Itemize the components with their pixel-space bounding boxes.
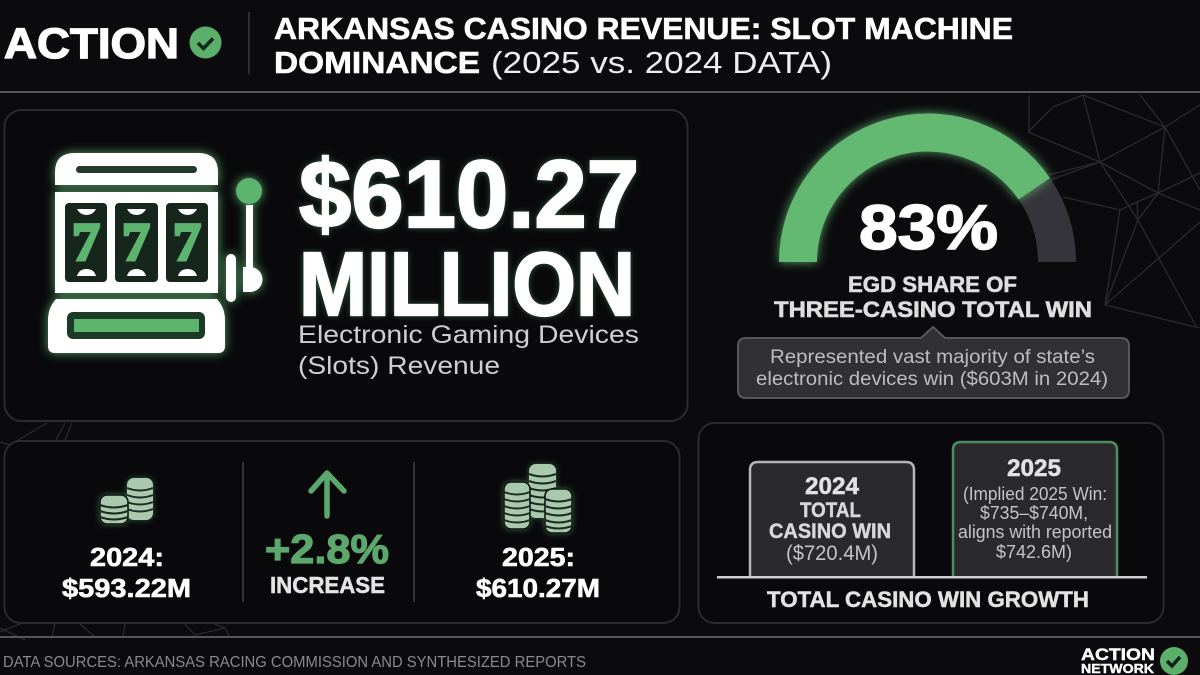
bar: 2024: ($720.4M) [786, 542, 878, 565]
label: increase: INCREASE [270, 572, 385, 598]
bar: 2024 [750, 462, 914, 577]
title: (2025 vs. 2024 DATA) [491, 45, 832, 80]
panel: slots revenue [4, 110, 688, 421]
bar: 2025: $742.6M) [996, 542, 1072, 562]
logo: Action: ACTION [4, 20, 179, 68]
bar: 2025: aligns with reported [958, 522, 1112, 542]
label: 2025 value [476, 542, 600, 603]
callout [738, 327, 1129, 398]
callout: Represented vast majority of state’s [770, 347, 1095, 368]
gauge label [774, 272, 1092, 322]
icon: slot machine: 7 [173, 212, 201, 272]
title: DOMINANCE [274, 45, 480, 80]
footer: data sources: DATA SOURCES: ARKANSAS RACING COMMISSION AND SYNTHESIZED REPORTS [3, 654, 586, 671]
icon: up arrow [311, 473, 344, 516]
label: increase [265, 526, 389, 598]
gauge label: THREE-CASINO TOTAL WIN [774, 297, 1092, 322]
big number: $610.27 [299, 141, 639, 248]
bar: 2025: (Implied 2025 Win: [963, 484, 1107, 504]
gauge: 83% share [798, 133, 1057, 263]
icon: slot machine [48, 153, 262, 353]
big unit: MILLION [299, 235, 635, 335]
icon: coins 2024 [100, 478, 153, 524]
bar: 2025 [953, 442, 1117, 577]
bar: 2025: $735–$740M, [980, 503, 1088, 523]
description: (Slots) Revenue [298, 352, 500, 380]
label: 2024 value: $593.22M [62, 573, 191, 603]
bar: 2024: 2024 [805, 473, 860, 500]
gauge: 83% share: 83% [859, 193, 998, 263]
bar: 2024: TOTAL [800, 499, 861, 522]
callout: electronic devices win ($603M in 2024) [756, 369, 1108, 390]
label: 2024 value [62, 542, 191, 603]
title [274, 11, 1013, 80]
bar: 2024: CASINO WIN [769, 520, 891, 543]
description [298, 321, 639, 380]
gauge label: EGD SHARE OF [848, 272, 1017, 297]
chart caption: TOTAL CASINO WIN GROWTH [767, 587, 1089, 612]
logo: Action Network: ACTION [1081, 645, 1155, 664]
icon: slot machine: 7 [72, 212, 100, 272]
description: Electronic Gaming Devices [298, 321, 639, 349]
panel: total casino win growth [698, 423, 1164, 623]
bar: 2025: 2025 [1007, 455, 1061, 482]
label: 2025 value: 2025: [502, 542, 575, 572]
icon: slot machine: 7 [122, 212, 150, 272]
label: 2024 value: 2024: [90, 542, 164, 572]
label: 2025 value: $610.27M [476, 573, 600, 603]
icon: coins 2025 [504, 464, 572, 533]
panel: year over year [4, 441, 680, 623]
label: increase: +2.8% [265, 526, 389, 572]
title: ARKANSAS CASINO REVENUE: SLOT MACHINE [274, 11, 1013, 46]
logo: Action Network [1081, 645, 1188, 675]
